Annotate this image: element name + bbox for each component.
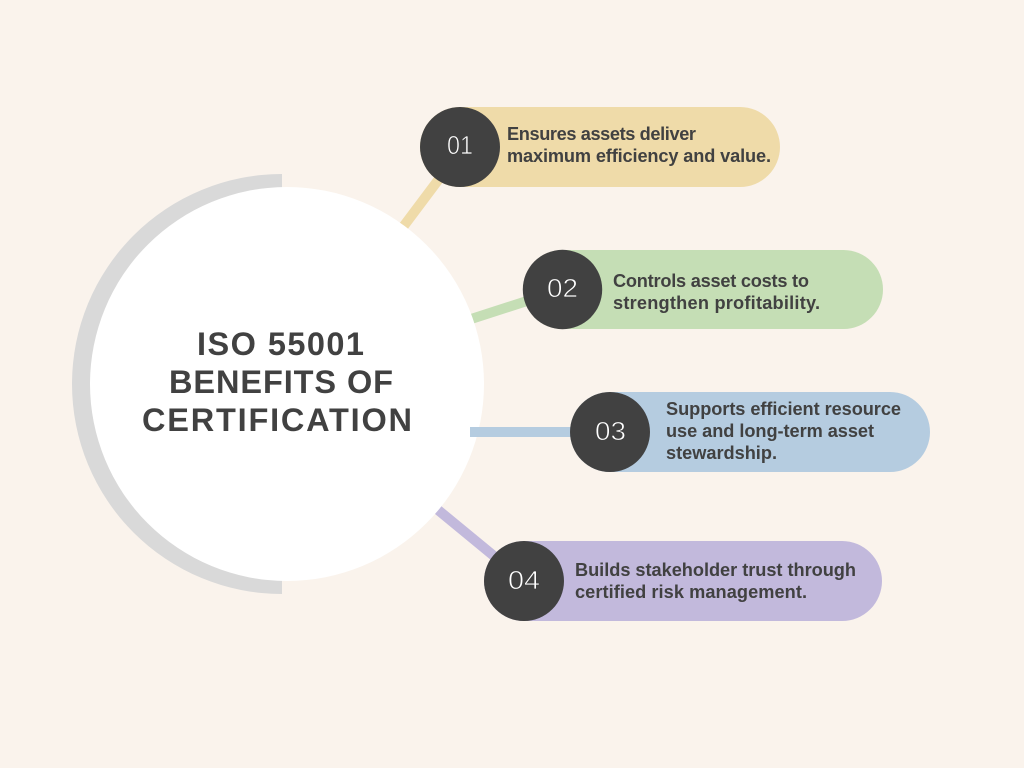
text 02 (613, 271, 820, 313)
title: CERTIFICATION (142, 402, 412, 438)
text 03: use and long-term asset (666, 421, 874, 441)
badge 03 (570, 392, 650, 472)
number 01: 01 (447, 130, 473, 160)
item 03 (570, 392, 930, 472)
badge 02 (523, 250, 602, 329)
title: BENEFITS OF (169, 364, 393, 400)
item 04 (484, 541, 882, 621)
connector 03 (470, 427, 580, 437)
item 01 (420, 107, 780, 187)
text 04: certified risk management. (575, 582, 807, 602)
text 03 (666, 399, 901, 463)
title (142, 326, 412, 438)
text 01: Ensures assets deliver (507, 124, 696, 144)
number 03: 03 (595, 416, 626, 446)
connector 02 (465, 300, 530, 321)
text 04 (575, 560, 856, 602)
pill 03 (570, 392, 930, 472)
text 03: Supports efficient resource (666, 399, 901, 419)
pill 01 (420, 107, 780, 187)
connector 01 (400, 171, 445, 231)
gray half ring (72, 174, 282, 594)
text 01: maximum efficiency and value. (507, 146, 771, 166)
text 02: Controls asset costs to (613, 271, 809, 291)
text 03: stewardship. (666, 443, 777, 463)
pill 04 (484, 541, 882, 621)
central circle (90, 187, 484, 581)
badge 01 (420, 107, 500, 187)
number 04: 04 (508, 565, 540, 595)
badge 04 (484, 541, 564, 621)
item 02 (523, 250, 883, 329)
connector 04 (432, 505, 500, 561)
title: ISO 55001 (197, 326, 364, 362)
text 04: Builds stakeholder trust through (575, 560, 856, 580)
pill 02 (523, 250, 883, 329)
text 01 (507, 124, 771, 166)
text 02: strengthen profitability. (613, 293, 820, 313)
number 02: 02 (547, 273, 578, 303)
